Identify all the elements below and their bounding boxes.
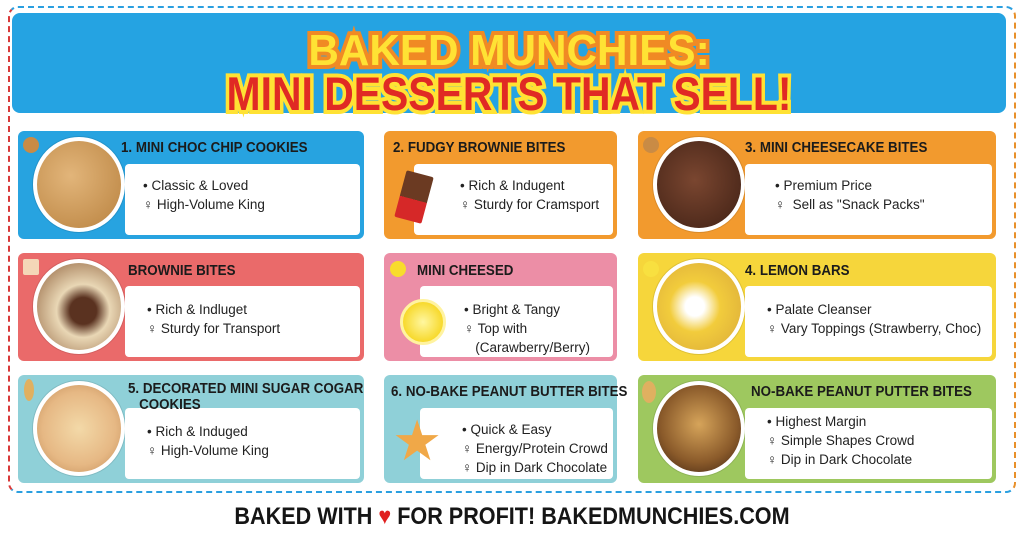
icon: lemon <box>643 261 659 277</box>
text panel <box>125 164 360 235</box>
heading: 5. DECORATED MINI SUGAR COGAR <box>128 381 363 397</box>
image: peanut balls <box>653 381 745 476</box>
title line 1: BAKED MUNCHIES: <box>308 26 710 75</box>
footer: BAKED WITH ♥ FOR PROFIT! BAKEDMUNCHIES.COM <box>234 503 790 530</box>
text panel: ♀ Sturdy for Transport <box>147 321 280 336</box>
heading: 6. NO-BAKE PEANUT BUTTER BITES <box>391 384 627 400</box>
card 9 <box>638 375 996 483</box>
text panel: • Quick & Easy <box>462 422 552 437</box>
heading: COOKIES <box>139 397 201 413</box>
heading: 1. MINI CHOC CHIP COOKIES <box>121 140 308 156</box>
card 8 <box>384 375 617 483</box>
card 1 <box>18 131 364 239</box>
text panel <box>745 164 992 235</box>
card 5 <box>384 253 617 361</box>
icon: peanut <box>642 381 656 403</box>
text panel <box>745 408 992 479</box>
text panel: ♀ Energy/Protein Crowd <box>462 441 608 456</box>
heading: MINI CHEESED <box>417 263 513 279</box>
text panel <box>414 164 613 235</box>
text panel: ♀ Dip in Dark Chocolate <box>462 460 607 475</box>
card 6 <box>638 253 996 361</box>
title line 2: MINI DESSERTS THAT SELL! <box>227 67 791 120</box>
icon: lemon <box>390 261 406 277</box>
text panel: • Palate Cleanser <box>767 302 872 317</box>
image: brownies <box>653 137 745 232</box>
icon: lemon slice <box>400 299 446 345</box>
heading <box>128 381 363 413</box>
text panel: ♀ Sturdy for Cramsport <box>460 197 599 212</box>
card 7 <box>18 375 364 483</box>
text panel <box>745 286 992 357</box>
text panel: ♀ Simple Shapes Crowd <box>767 433 914 448</box>
icon: cookie <box>23 137 39 153</box>
text panel: (Carawberry/Berry) <box>475 340 590 355</box>
text panel: • Classic & Loved <box>143 178 248 193</box>
text panel: • Highest Margin <box>767 414 866 429</box>
icon: cookie <box>643 137 659 153</box>
text panel: • Rich & Induged <box>147 424 248 439</box>
header banner <box>12 13 1006 113</box>
text panel <box>420 408 613 479</box>
text panel <box>125 408 360 479</box>
card 2 <box>384 131 617 239</box>
heading: 4. LEMON BARS <box>745 263 850 279</box>
image: cookies <box>33 137 125 232</box>
heading: NO-BAKE PEANUT PUTTER BITES <box>751 384 972 400</box>
heading: 2. FUDGY BROWNIE BITES <box>393 140 565 156</box>
text panel: • Bright & Tangy <box>464 302 560 317</box>
text panel: ♀ High-Volume King <box>143 197 265 212</box>
image: cupcakes <box>33 259 125 354</box>
text panel <box>420 286 613 357</box>
text panel: • Premium Price <box>775 178 872 193</box>
card 3 <box>638 131 996 239</box>
text panel: ♀ Sell as "Snack Packs" <box>775 197 925 212</box>
image: sugar cookies <box>33 381 125 476</box>
icon: peanut <box>24 379 34 401</box>
image: lemon bars <box>653 259 745 354</box>
text panel: • Rich & Indluget <box>147 302 247 317</box>
icon: chocolate bar <box>394 170 434 224</box>
text panel: ♀ Top with <box>464 321 527 336</box>
icon: star cookie: ★ <box>392 409 442 472</box>
text panel: • Rich & Indugent <box>460 178 565 193</box>
heading: BROWNIE BITES <box>128 263 235 279</box>
text panel <box>125 286 360 357</box>
heading: 3. MINI CHEESECAKE BITES <box>745 140 927 156</box>
card 4 <box>18 253 364 361</box>
text panel: ♀ High-Volume King <box>147 443 269 458</box>
icon: cake <box>23 259 39 275</box>
text panel: ♀ Dip in Dark Chocolate <box>767 452 912 467</box>
text panel: ♀ Vary Toppings (Strawberry, Choc) <box>767 321 981 336</box>
